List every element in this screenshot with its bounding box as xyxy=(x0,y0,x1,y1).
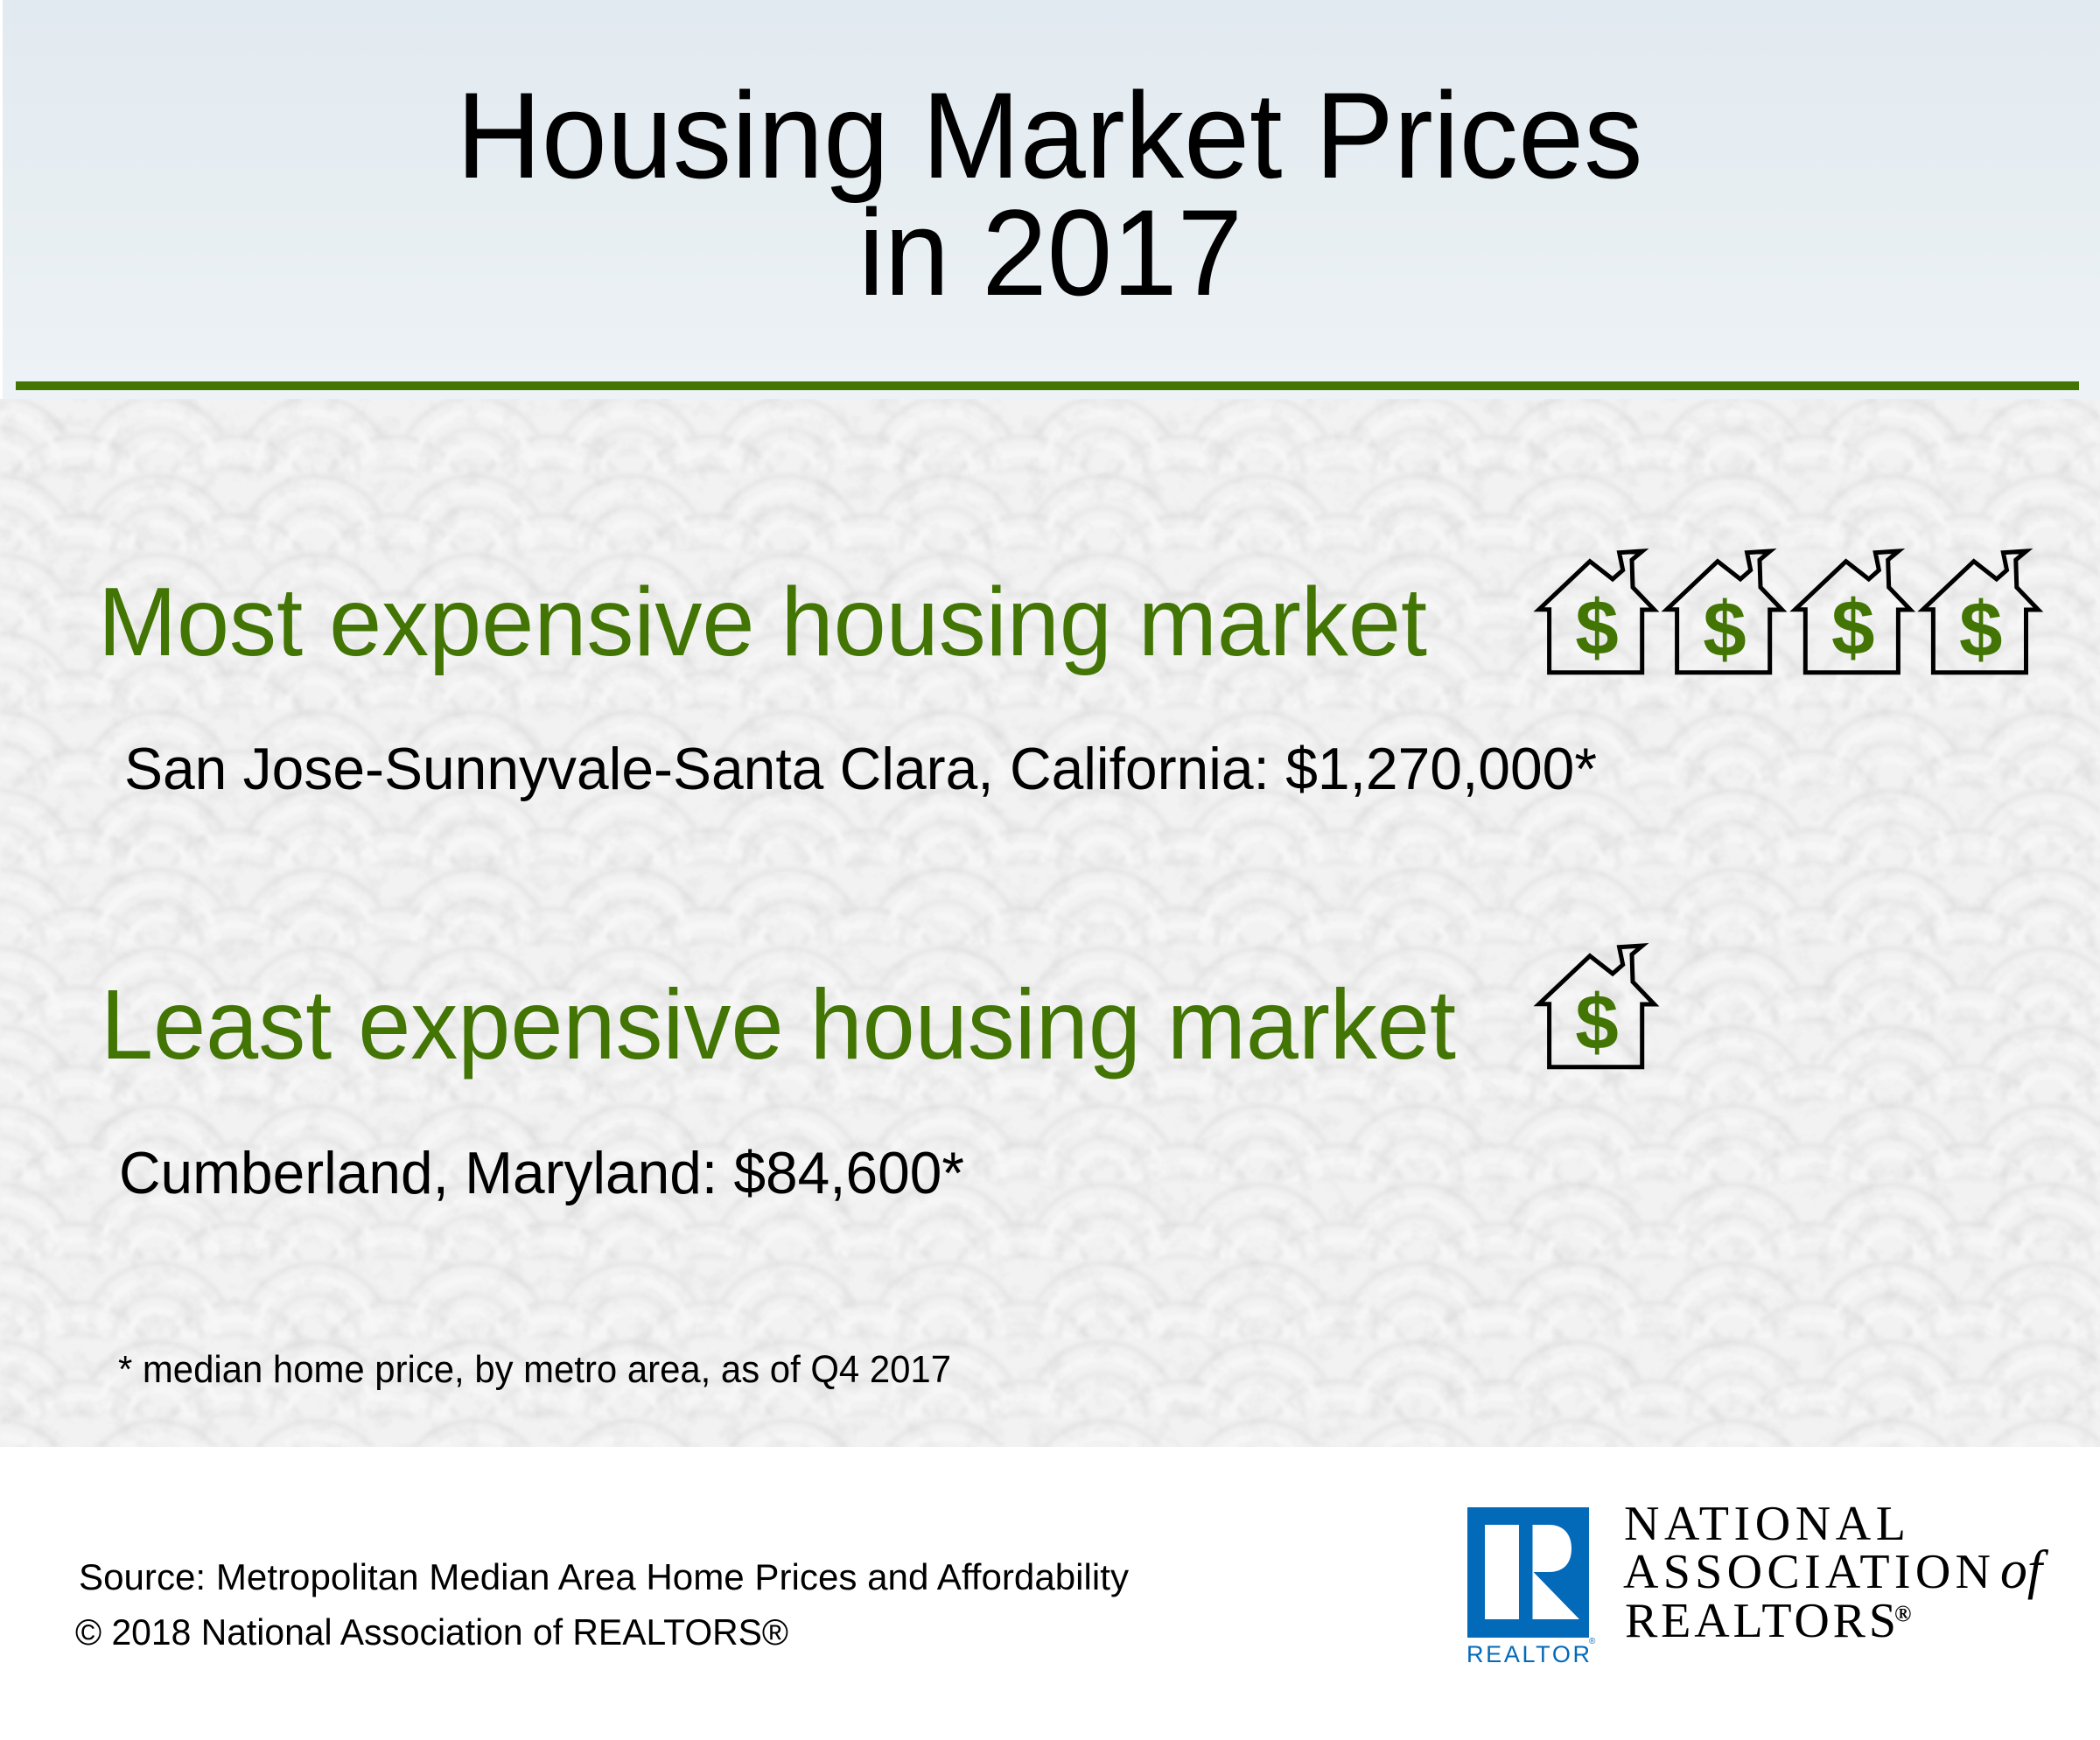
footer: source and copyright: Source: Metropolitan Median Area Home Prices and Affordability xyxy=(79,1556,1129,1597)
text: organisation name: REALTORS xyxy=(1625,1594,1896,1648)
footnote: * median home price, by metro area, as of Q4 2017 xyxy=(118,1348,951,1391)
background: patterned paper panel xyxy=(0,399,2100,1447)
footer: source and copyright: © 2018 National Association of REALTORS® xyxy=(75,1611,788,1653)
heading: most expensive: Most expensive housing market xyxy=(98,568,1427,676)
icon: house 1 xyxy=(1539,551,1655,673)
text: organisation name: NATIONAL xyxy=(1624,1497,1906,1551)
icon: house 3 xyxy=(1796,551,1910,673)
text: organisation name: ASSOCIATION xyxy=(1623,1545,1991,1599)
text: REALTOR wordmark: REALTOR xyxy=(1466,1641,1590,1667)
icon: blue R block xyxy=(1467,1507,1589,1638)
title: Housing Market Prices xyxy=(457,66,1643,204)
green divider bar xyxy=(16,381,2079,390)
icon: single house with dollar sign xyxy=(1539,946,1655,1067)
text: organisation name xyxy=(1623,1497,2049,1648)
icon: house 4: $ xyxy=(1959,585,2003,673)
logo: National Association of Realtors xyxy=(1466,1497,2049,1667)
text: registered mark small: ® xyxy=(1589,1637,1596,1646)
section: least expensive housing market xyxy=(101,946,1655,1206)
icon: house 4 xyxy=(1923,551,2038,673)
text: organisation name: ® xyxy=(1894,1601,1911,1626)
text: Cumberland price: Cumberland, Maryland: $84,600* xyxy=(119,1140,964,1206)
title xyxy=(457,66,1643,321)
section: most expensive housing market xyxy=(98,551,2038,802)
icon: single house with dollar sign: $ xyxy=(1575,978,1619,1066)
icon: house 2 xyxy=(1667,551,1782,673)
icon: house 2: $ xyxy=(1703,585,1746,673)
text: organisation name: of xyxy=(2000,1541,2049,1600)
heading: least expensive: Least expensive housing market xyxy=(101,969,1456,1080)
title: in 2017 xyxy=(858,184,1242,321)
panel: header band xyxy=(3,0,2100,399)
icon: house 1: $ xyxy=(1575,583,1619,671)
text: San Jose price: San Jose-Sunnyvale-Santa Clara, California: $1,270,000* xyxy=(124,736,1597,802)
icon: house 3: $ xyxy=(1831,583,1874,671)
icon row: four houses with dollar signs xyxy=(1539,551,2038,673)
footer: source and copyright xyxy=(75,1556,1129,1653)
